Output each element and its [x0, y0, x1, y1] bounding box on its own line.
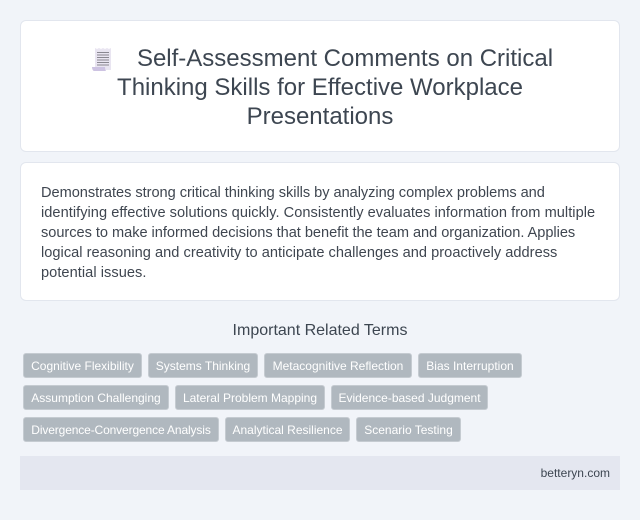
description text: logical reasoning and creativity to anticipate challenges and proactively address	[41, 245, 557, 261]
title line 2: Thinking Skills for Effective Workplace	[117, 74, 523, 101]
tag: Analytical Resilience: Analytical Resilience	[232, 423, 343, 437]
tag: Systems Thinking: Systems Thinking	[156, 359, 250, 373]
description text: Demonstrates strong critical thinking skills by analyzing complex problems and	[41, 185, 545, 201]
heading: important related terms: Important Related Terms	[233, 322, 407, 339]
tag: Evidence-based Judgment: Evidence-based Judgment	[338, 391, 481, 405]
description text	[41, 185, 595, 281]
tag: Bias Interruption	[418, 353, 522, 378]
tag: Lateral Problem Mapping	[175, 385, 325, 410]
tag: Scenario Testing: Scenario Testing	[364, 423, 453, 437]
tag: Bias Interruption: Bias Interruption	[426, 359, 514, 373]
tag: Evidence-based Judgment	[331, 385, 488, 410]
tag: Metacognitive Reflection: Metacognitive Reflection	[273, 359, 403, 373]
panel: title card	[20, 20, 620, 152]
tag: Divergence-Convergence Analysis	[23, 417, 219, 442]
tag: Divergence-Convergence Analysis: Divergence-Convergence Analysis	[31, 423, 211, 437]
tag: Cognitive Flexibility	[23, 353, 142, 378]
tag: Scenario Testing	[356, 417, 461, 442]
panel: description card	[20, 162, 620, 301]
tag: Analytical Resilience	[225, 417, 350, 442]
tag: Lateral Problem Mapping: Lateral Problem Mapping	[183, 391, 317, 405]
tag: Assumption Challenging: Assumption Challenging	[31, 391, 161, 405]
description text: identifying effective solutions quickly. Consistently evaluates information from multiple	[41, 205, 595, 221]
icon: document scroll	[92, 48, 111, 71]
footer bar	[20, 456, 620, 490]
footer: source: betteryn.com	[541, 466, 610, 480]
title line 3: Presentations	[247, 103, 393, 130]
title line 1: Self-Assessment Comments on Critical	[137, 45, 553, 72]
tag: Assumption Challenging	[23, 385, 169, 410]
tag: Systems Thinking	[148, 353, 258, 378]
tag: Metacognitive Reflection	[264, 353, 412, 378]
description text: potential issues.	[41, 265, 147, 281]
description text: sources to make informed decisions that benefit the team and organization. Applies	[41, 225, 575, 241]
tag: Cognitive Flexibility: Cognitive Flexibility	[31, 359, 134, 373]
